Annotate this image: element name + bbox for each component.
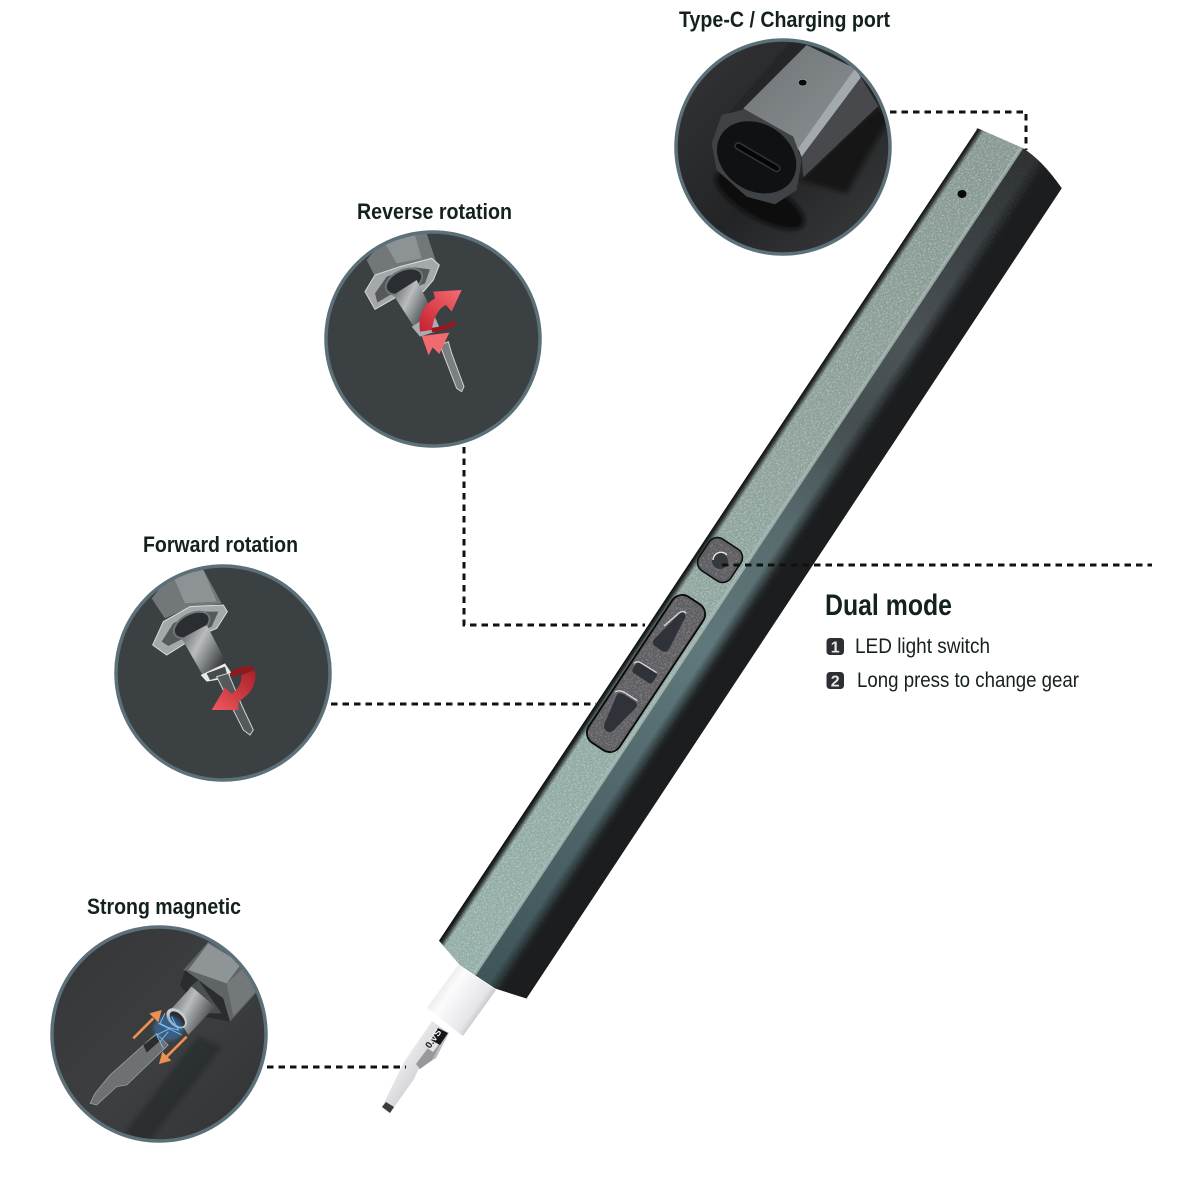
list item 1: LED light switch bbox=[855, 635, 990, 658]
lightning bbox=[157, 1013, 182, 1048]
gear button bbox=[631, 661, 658, 685]
ridge highlight bbox=[471, 143, 1025, 979]
bit shank bbox=[90, 1033, 168, 1105]
screwdriver tip: silver collar and bit: 0.VS bbox=[423, 1028, 444, 1051]
list item 1: 1 bbox=[831, 640, 840, 656]
speckle on middle face bbox=[473, 144, 1046, 993]
red curved arrow bbox=[212, 670, 255, 710]
callout: charging port circle bbox=[675, 37, 891, 255]
hex head bbox=[183, 942, 262, 1022]
callout: reverse rotation circle bbox=[325, 231, 541, 447]
dashed connector: forward rotation bbox=[331, 702, 596, 706]
heading: forward rotation: Forward rotation bbox=[143, 532, 298, 557]
list item 2: Long press to change gear bbox=[857, 669, 1079, 692]
dashed connector: charging port bbox=[890, 112, 1026, 150]
hex body bbox=[366, 234, 436, 276]
black shadow face bbox=[486, 153, 1074, 1011]
light speckle on green face bbox=[428, 115, 1025, 978]
green face bbox=[428, 115, 1026, 980]
list item 2: 2 bbox=[831, 674, 840, 690]
port barrel side bbox=[802, 77, 878, 177]
left dark edge bbox=[428, 115, 990, 956]
dark arrow tail bbox=[432, 323, 455, 330]
dashed connector: power button bbox=[722, 564, 1152, 566]
upper curved arrow bbox=[419, 290, 462, 332]
hex body bbox=[152, 567, 222, 618]
screw bit bbox=[217, 673, 253, 735]
reverse button bbox=[604, 693, 637, 732]
indicator hole bbox=[798, 79, 807, 86]
port face bbox=[717, 121, 796, 194]
socket ring bbox=[180, 970, 230, 1022]
USB-C slot bbox=[738, 146, 777, 168]
shadow under port bbox=[714, 172, 806, 232]
heading: reverse rotation: Reverse rotation bbox=[357, 199, 512, 224]
shaft bbox=[394, 280, 428, 326]
rocker switch bbox=[582, 590, 710, 757]
orange arrow up bbox=[133, 1018, 153, 1038]
callout: forward rotation circle bbox=[115, 565, 331, 781]
charge indicator hole bbox=[958, 190, 966, 198]
soft shadow bbox=[126, 1038, 220, 1138]
port barrel highlight bbox=[798, 68, 861, 157]
heading: charging port: Type-C / Charging port bbox=[679, 7, 890, 32]
heading: dual mode: Dual mode bbox=[825, 589, 952, 622]
flange bbox=[153, 605, 227, 655]
screwdriver tip: silver collar and bit bbox=[382, 965, 496, 1113]
orange arrow down bbox=[167, 1037, 187, 1057]
lightning glow bbox=[153, 1016, 183, 1041]
power button bbox=[694, 534, 746, 586]
blue-grey middle face bbox=[472, 144, 1074, 1011]
dashed connector: strong magnetic bbox=[267, 1066, 406, 1068]
port barrel top bbox=[743, 45, 855, 150]
chuck cylinder bbox=[172, 987, 215, 1035]
screw bit bbox=[440, 342, 464, 392]
flange bbox=[365, 258, 439, 309]
port bevel bbox=[712, 109, 802, 204]
port barrel left bbox=[727, 37, 808, 115]
lower arrow bbox=[422, 333, 449, 355]
dark speckle on green face bbox=[428, 115, 1025, 978]
dashed connector: reverse rotation bbox=[464, 447, 645, 625]
dark arrow back bbox=[229, 666, 254, 677]
forward button bbox=[653, 613, 685, 652]
heading: strong magnetic: Strong magnetic bbox=[87, 894, 241, 919]
screwdriver body bbox=[428, 115, 1074, 1011]
black shadow beside barrel bbox=[800, 107, 890, 193]
callout: strong magnetic circle bbox=[51, 926, 267, 1147]
shaft bbox=[182, 625, 227, 675]
